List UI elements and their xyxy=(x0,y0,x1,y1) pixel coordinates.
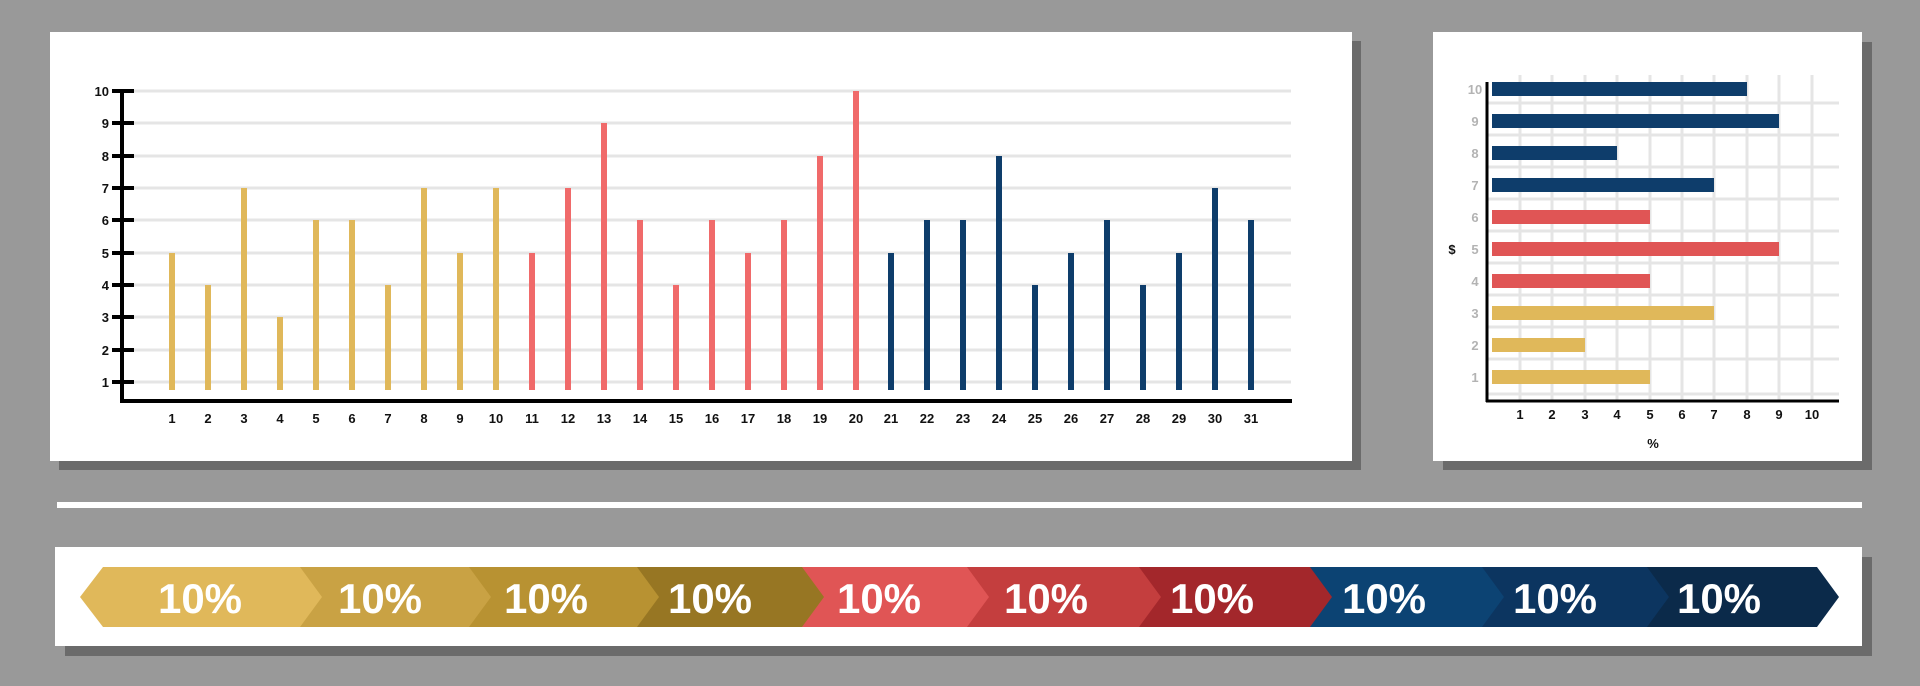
y axis labels: 3 xyxy=(102,310,109,325)
x labels: 6 xyxy=(1678,407,1686,422)
x axis labels: 28 xyxy=(1136,411,1150,426)
x labels: 9 xyxy=(1775,407,1783,422)
y axis labels: 5 xyxy=(102,246,109,261)
bars: coral xyxy=(529,91,859,390)
x labels: 1 xyxy=(1516,407,1524,422)
x axis labels: 31 xyxy=(1244,411,1258,426)
x labels xyxy=(1516,407,1819,422)
y axis labels: 7 xyxy=(102,181,109,196)
x labels: 2 xyxy=(1548,407,1556,422)
panel: main bar chart xyxy=(50,32,1361,470)
divider line xyxy=(57,502,1862,508)
x axis labels xyxy=(168,411,1258,426)
percentage labels: 10% xyxy=(1004,575,1088,622)
x axis labels: 25 xyxy=(1028,411,1042,426)
y axis labels: 10 xyxy=(95,84,109,99)
x axis labels: 13 xyxy=(597,411,611,426)
x axis labels: 2 xyxy=(204,411,212,426)
x axis labels: 17 xyxy=(741,411,755,426)
x axis labels: 23 xyxy=(956,411,970,426)
y labels: 4 xyxy=(1471,274,1479,289)
x axis labels: 4 xyxy=(276,411,284,426)
y labels: 8 xyxy=(1471,146,1479,161)
x axis labels: 11 xyxy=(525,411,539,426)
percentage labels: 10% xyxy=(1342,575,1426,622)
percentage labels: 10% xyxy=(338,575,422,622)
x axis labels: 19 xyxy=(813,411,827,426)
x axis labels: 1 xyxy=(168,411,176,426)
percentage labels xyxy=(158,575,1761,622)
panel: percentage arrow strip xyxy=(55,547,1872,656)
x axis labels: 18 xyxy=(777,411,791,426)
y axis labels: 8 xyxy=(102,149,109,164)
x axis labels: 6 xyxy=(348,411,356,426)
percentage labels: 10% xyxy=(1677,575,1761,622)
y axis labels: 2 xyxy=(102,343,109,358)
percentage labels: 10% xyxy=(158,575,242,622)
percentage labels: 10% xyxy=(837,575,921,622)
y labels xyxy=(1468,82,1482,385)
x labels: 3 xyxy=(1581,407,1589,422)
y axis xyxy=(112,89,1292,403)
bars: gold xyxy=(169,188,499,390)
percentage labels: 10% xyxy=(668,575,752,622)
x axis labels: 7 xyxy=(384,411,392,426)
y axis labels: 1 xyxy=(102,375,109,390)
x axis labels: 29 xyxy=(1172,411,1186,426)
x axis labels: 16 xyxy=(705,411,719,426)
x labels: 7 xyxy=(1710,407,1718,422)
y axis labels: 6 xyxy=(102,213,109,228)
percentage labels: 10% xyxy=(504,575,588,622)
bars: navy xyxy=(888,156,1254,390)
x axis labels: 3 xyxy=(240,411,248,426)
arrow segments xyxy=(80,567,1839,627)
y labels: 9 xyxy=(1471,114,1479,129)
y axis labels xyxy=(95,84,110,390)
y labels: 5 xyxy=(1471,242,1479,257)
x axis labels: 27 xyxy=(1100,411,1114,426)
x axis labels: 5 xyxy=(312,411,320,426)
x axis labels: 10 xyxy=(489,411,503,426)
y labels: 10 xyxy=(1468,82,1482,97)
x axis labels: 30 xyxy=(1208,411,1222,426)
y labels: 2 xyxy=(1471,338,1479,353)
y labels: 7 xyxy=(1471,178,1479,193)
x labels: 4 xyxy=(1613,407,1621,422)
x axis labels: 26 xyxy=(1064,411,1078,426)
axes xyxy=(1486,82,1839,402)
x axis labels: 22 xyxy=(920,411,934,426)
x axis labels: 21 xyxy=(884,411,898,426)
y axis labels: 4 xyxy=(102,278,110,293)
x axis labels: 9 xyxy=(456,411,464,426)
y labels: 3 xyxy=(1471,306,1479,321)
y labels: 6 xyxy=(1471,210,1479,225)
y labels: 1 xyxy=(1471,370,1479,385)
horizontal bars xyxy=(1492,82,1779,384)
percentage labels: 10% xyxy=(1170,575,1254,622)
x axis labels: 20 xyxy=(849,411,863,426)
y axis labels: 9 xyxy=(102,116,109,131)
panel: horizontal bar chart xyxy=(1433,32,1872,470)
x labels: 10 xyxy=(1805,407,1819,422)
percentage labels: 10% xyxy=(1513,575,1597,622)
axis label $: $ xyxy=(1448,242,1456,257)
x labels: 5 xyxy=(1646,407,1654,422)
x axis labels: 24 xyxy=(992,411,1007,426)
x axis labels: 14 xyxy=(633,411,648,426)
axis label %: % xyxy=(1647,436,1659,451)
x axis labels: 12 xyxy=(561,411,575,426)
x axis labels: 15 xyxy=(669,411,683,426)
x labels: 8 xyxy=(1743,407,1751,422)
x axis labels: 8 xyxy=(420,411,428,426)
